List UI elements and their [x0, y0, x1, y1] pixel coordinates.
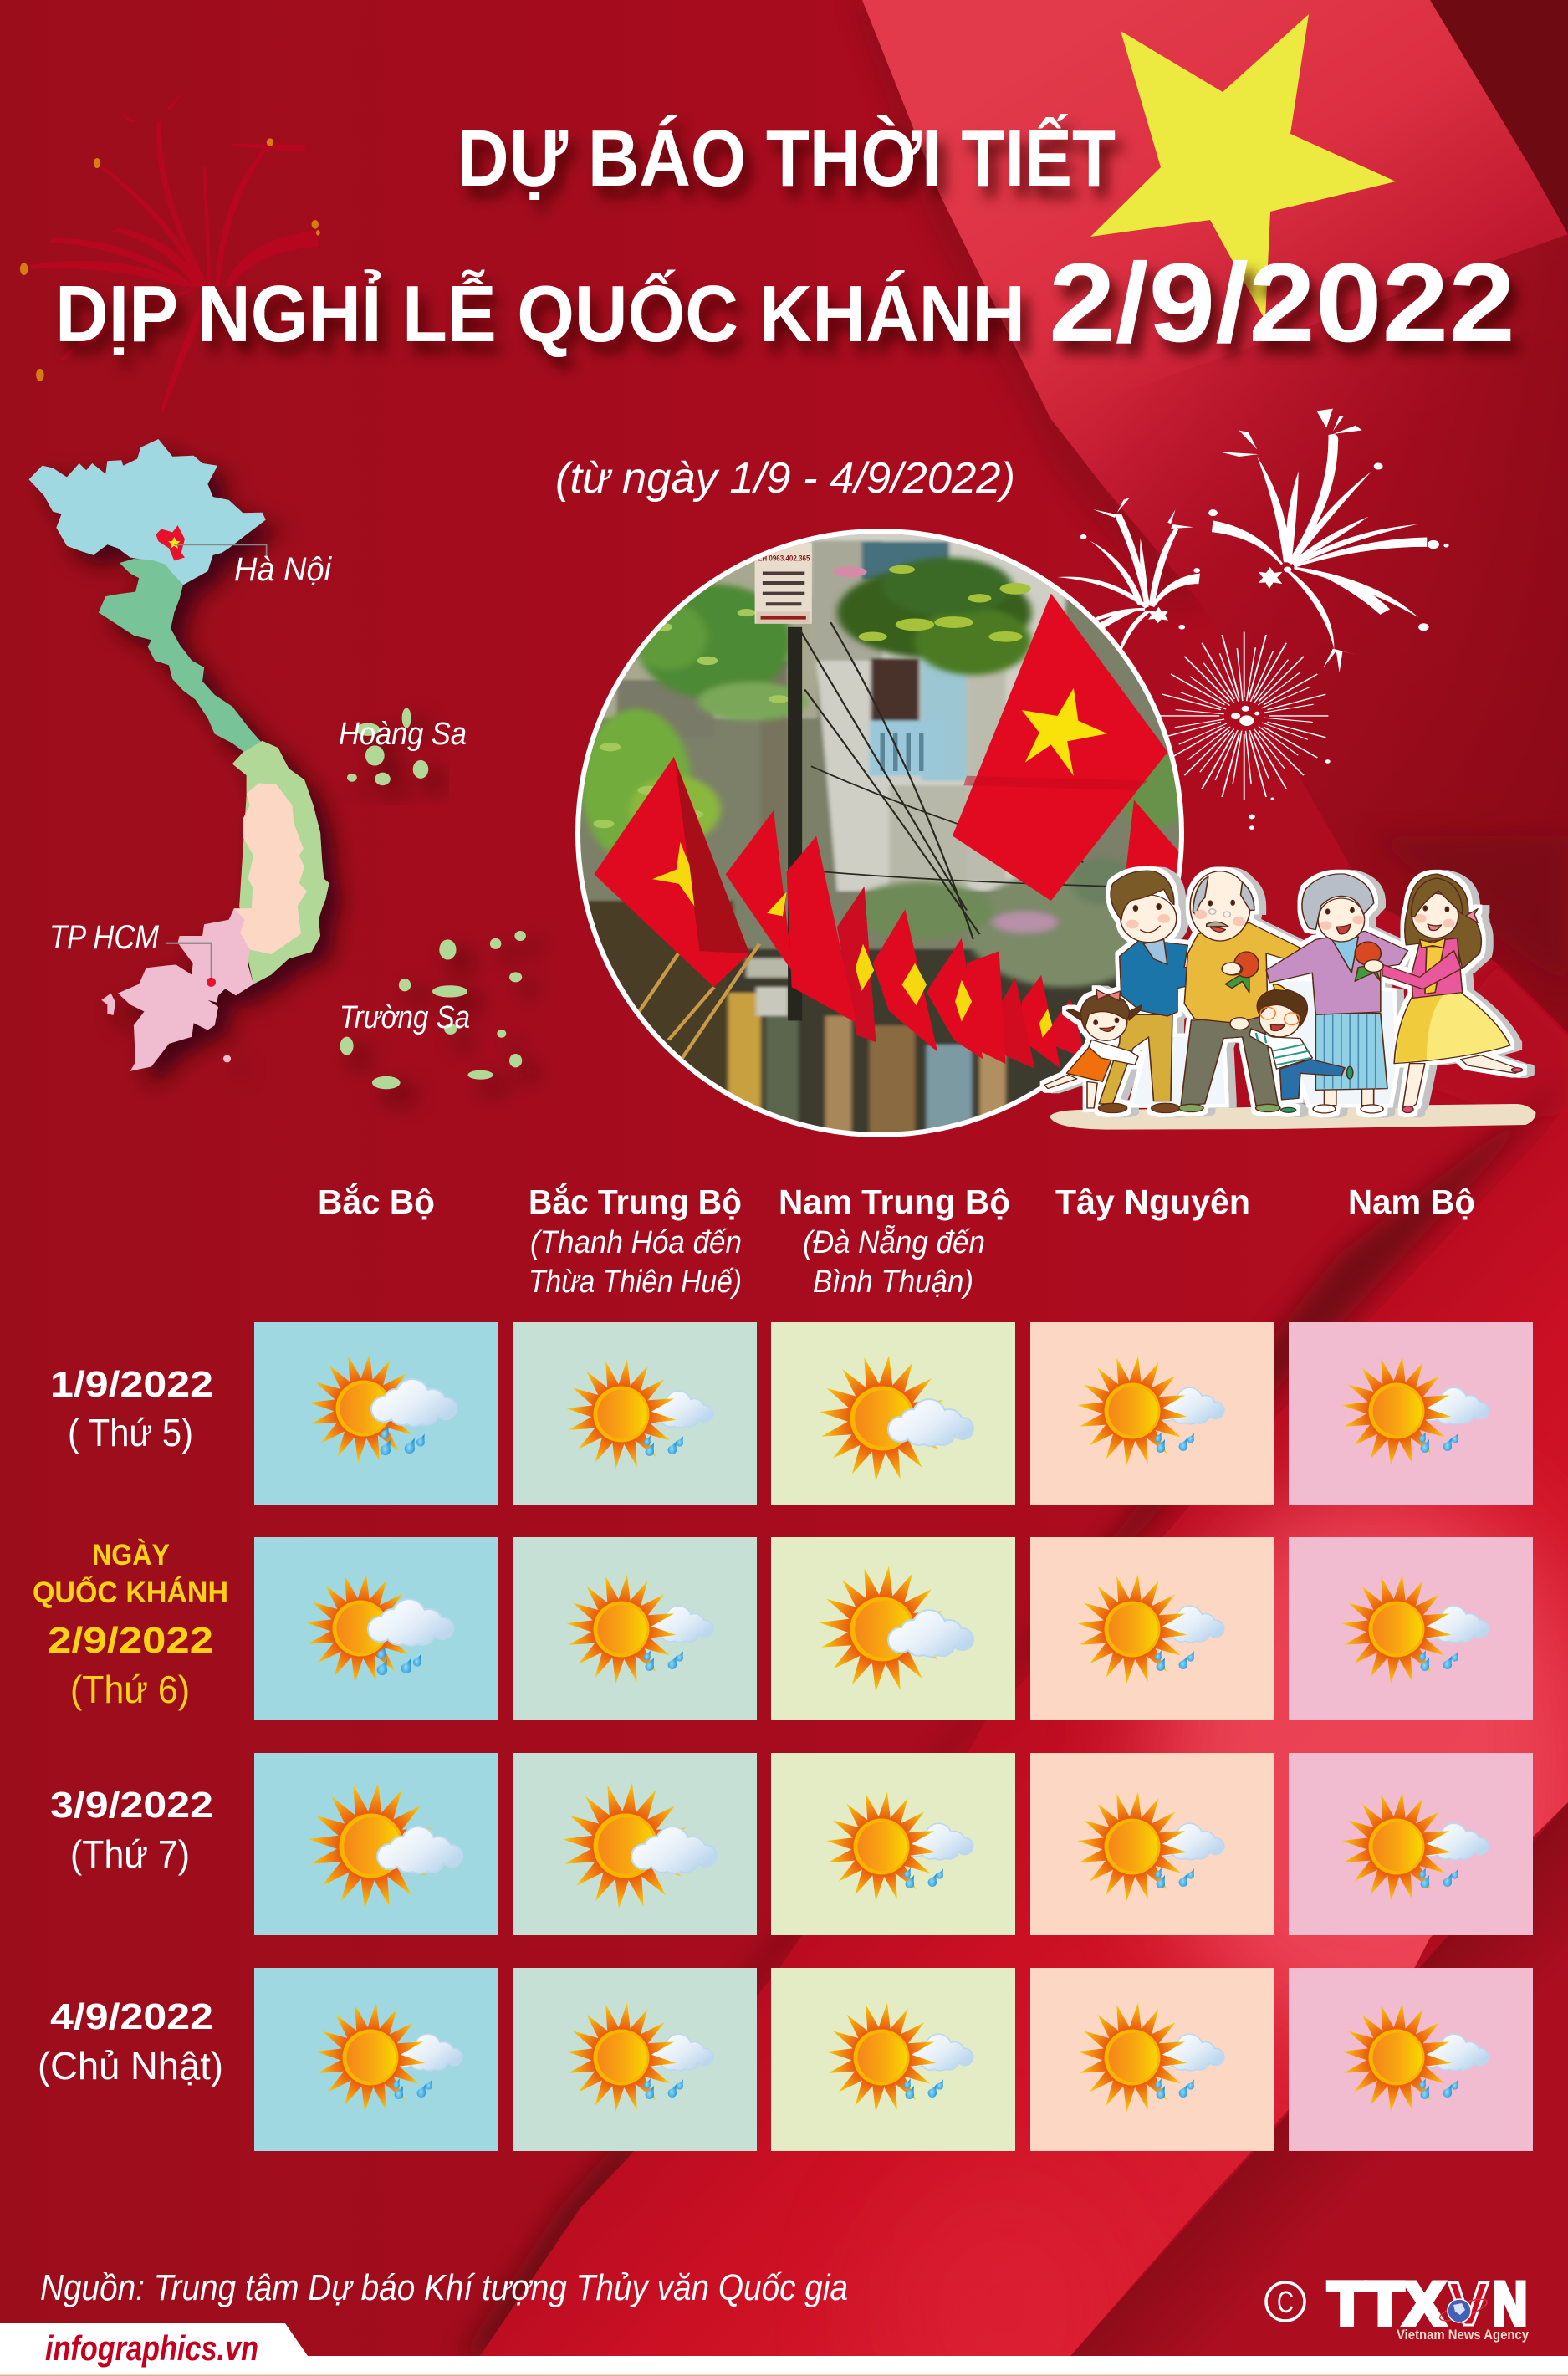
row label 4/9: [38, 1996, 223, 2087]
cell Bac Trung Bo 4/9: [513, 1968, 757, 2151]
title: [55, 113, 1515, 365]
copyright and TTXVN logo: [1266, 2271, 1529, 2343]
title date: 2/9/2022: [1049, 241, 1515, 365]
street flags: [594, 757, 1184, 1069]
street sign: [755, 543, 812, 624]
cell Nam Bo 2/9: [1289, 1537, 1533, 1720]
header Nam Trung Bo: (Đà Nẵng đến: [803, 1224, 985, 1260]
subtitle: (từ ngày 1/9 - 4/9/2022): [555, 454, 1015, 503]
header Bac Trung Bo: (Thanh Hóa đến: [530, 1225, 742, 1260]
row label national day: NGÀY: [92, 1538, 170, 1571]
copyright mark: [1266, 2282, 1305, 2321]
header Bac Trung Bo: Bắc Trung Bộ: [529, 1183, 742, 1221]
faint fireworks top left: [20, 89, 320, 412]
cell Nam Trung Bo 3/9: [771, 1753, 1015, 1935]
label TP HCM: TP HCM: [49, 919, 160, 956]
cell Bac Bo 1/9: [254, 1322, 498, 1505]
large flag: [953, 594, 1167, 901]
header Nam Trung Bo: [779, 1183, 1010, 1300]
grandmother: [1266, 874, 1407, 1113]
column headers: [318, 1183, 1475, 1300]
title line 2: DỊP NGHỈ LỄ QUỐC KHÁNH: [55, 268, 1025, 359]
cell Tay Nguyen 1/9: [1030, 1322, 1274, 1505]
man: [1098, 871, 1222, 1113]
label Truong Sa: Trường Sa: [340, 1000, 470, 1035]
row 1/9: [254, 1322, 1533, 1505]
logo globe: [1438, 2295, 1489, 2325]
cell Bac Trung Bo 3/9: [513, 1753, 757, 1935]
row label 1/9: ( Thứ 5): [68, 1411, 193, 1454]
cell Bac Bo 2/9: [254, 1537, 498, 1720]
row label 3/9: [50, 1785, 213, 1876]
backdrop between figures: [1133, 981, 1396, 1104]
firework large: [1208, 409, 1449, 672]
cell Nam Trung Bo 1/9: [771, 1322, 1015, 1505]
Hoang Sa islands: [347, 708, 428, 785]
website label: infographics.vn: [45, 2328, 258, 2368]
cell Bac Bo 4/9: [254, 1968, 498, 2151]
Ho Chi Minh City marker: [166, 943, 216, 987]
row label 1/9: 1/9/2022: [50, 1364, 213, 1405]
cell Nam Trung Bo 2/9: [771, 1537, 1015, 1720]
map regions: [29, 439, 329, 1071]
grandfather: [1179, 871, 1300, 1112]
young woman: [1222, 874, 1523, 1113]
header Bac Bo: Bắc Bộ: [318, 1183, 435, 1221]
row label national day: [33, 1538, 228, 1711]
row label 1/9: [50, 1364, 213, 1454]
cell Tay Nguyen 2/9: [1030, 1537, 1274, 1720]
fireworks: [1049, 409, 1449, 830]
cell Bac Trung Bo 1/9: [513, 1322, 757, 1505]
firework small: [1049, 498, 1200, 677]
background with flag ribbons: [462, 0, 1568, 2356]
firework radial: [1160, 625, 1331, 830]
cell Nam Bo 3/9: [1289, 1753, 1533, 1935]
weather grid: [254, 1322, 1533, 2151]
logo wordmark: TTX: [1328, 2271, 1445, 2338]
icon: yellow flag star: [1090, 14, 1396, 320]
map of Vietnam: [29, 439, 526, 1089]
family illustration: [1044, 871, 1535, 1130]
label Hoang Sa: Hoàng Sa: [339, 717, 467, 752]
row 3/9: [254, 1753, 1533, 1935]
header Nam Trung Bo: Nam Trung Bộ: [779, 1183, 1010, 1221]
family figures: [1044, 871, 1523, 1113]
boy: [1230, 984, 1353, 1112]
row label 4/9: (Chủ Nhật): [38, 2044, 223, 2087]
logo tagline: Vietnam News Agency: [1397, 2327, 1529, 2343]
cell Tay Nguyen 3/9: [1030, 1753, 1274, 1935]
source text: Nguồn: Trung tâm Dự báo Khí tượng Thủy văn Quốc gia: [40, 2267, 848, 2308]
row label national day: (Thứ 6): [70, 1668, 190, 1711]
label Ha Noi: Hà Nội: [234, 551, 332, 588]
cell Tay Nguyen 4/9: [1030, 1968, 1274, 2151]
row labels: [33, 1364, 228, 2087]
photo content: [571, 526, 1193, 1141]
row label national day: QUỐC KHÁNH: [33, 1576, 228, 1609]
header Tay Nguyen: Tây Nguyên: [1055, 1183, 1250, 1221]
row label 3/9: (Thứ 7): [70, 1832, 190, 1876]
cell Bac Bo 3/9: [254, 1753, 498, 1935]
cell Nam Trung Bo 4/9: [771, 1968, 1015, 2151]
cell Bac Trung Bo 2/9: [513, 1537, 757, 1720]
copyright mark: C: [1277, 2285, 1294, 2319]
header Bac Trung Bo: [529, 1183, 742, 1300]
cell Nam Bo 4/9: [1289, 1968, 1533, 2151]
footer band: [0, 2323, 1568, 2376]
header Bac Trung Bo: Thừa Thiên Huế): [529, 1265, 742, 1300]
photo circle with street flags: [571, 526, 1193, 1141]
ground: [1050, 1104, 1535, 1130]
street sign: LH 0963.402.365: [758, 554, 810, 563]
row label 4/9: 4/9/2022: [50, 1996, 213, 2037]
Hanoi marker: [156, 525, 267, 560]
row label national day: 2/9/2022: [48, 1620, 213, 1661]
logo wordmark: N: [1493, 2271, 1527, 2338]
title line 1: DỰ BÁO THỜI TIẾT: [457, 113, 1116, 203]
photo ring: [575, 529, 1184, 1137]
row label 3/9: 3/9/2022: [50, 1785, 213, 1826]
girl: [1044, 989, 1142, 1108]
logo wordmark: [1328, 2271, 1527, 2338]
logo wordmark: V: [1448, 2271, 1489, 2338]
cell Nam Bo 1/9: [1289, 1322, 1533, 1505]
row 4/9: [254, 1968, 1533, 2151]
row 2/9: [254, 1537, 1533, 1720]
header Nam Bo: Nam Bộ: [1348, 1183, 1475, 1221]
Truong Sa islands: [340, 931, 526, 1089]
header Nam Trung Bo: Bình Thuận): [813, 1265, 973, 1300]
